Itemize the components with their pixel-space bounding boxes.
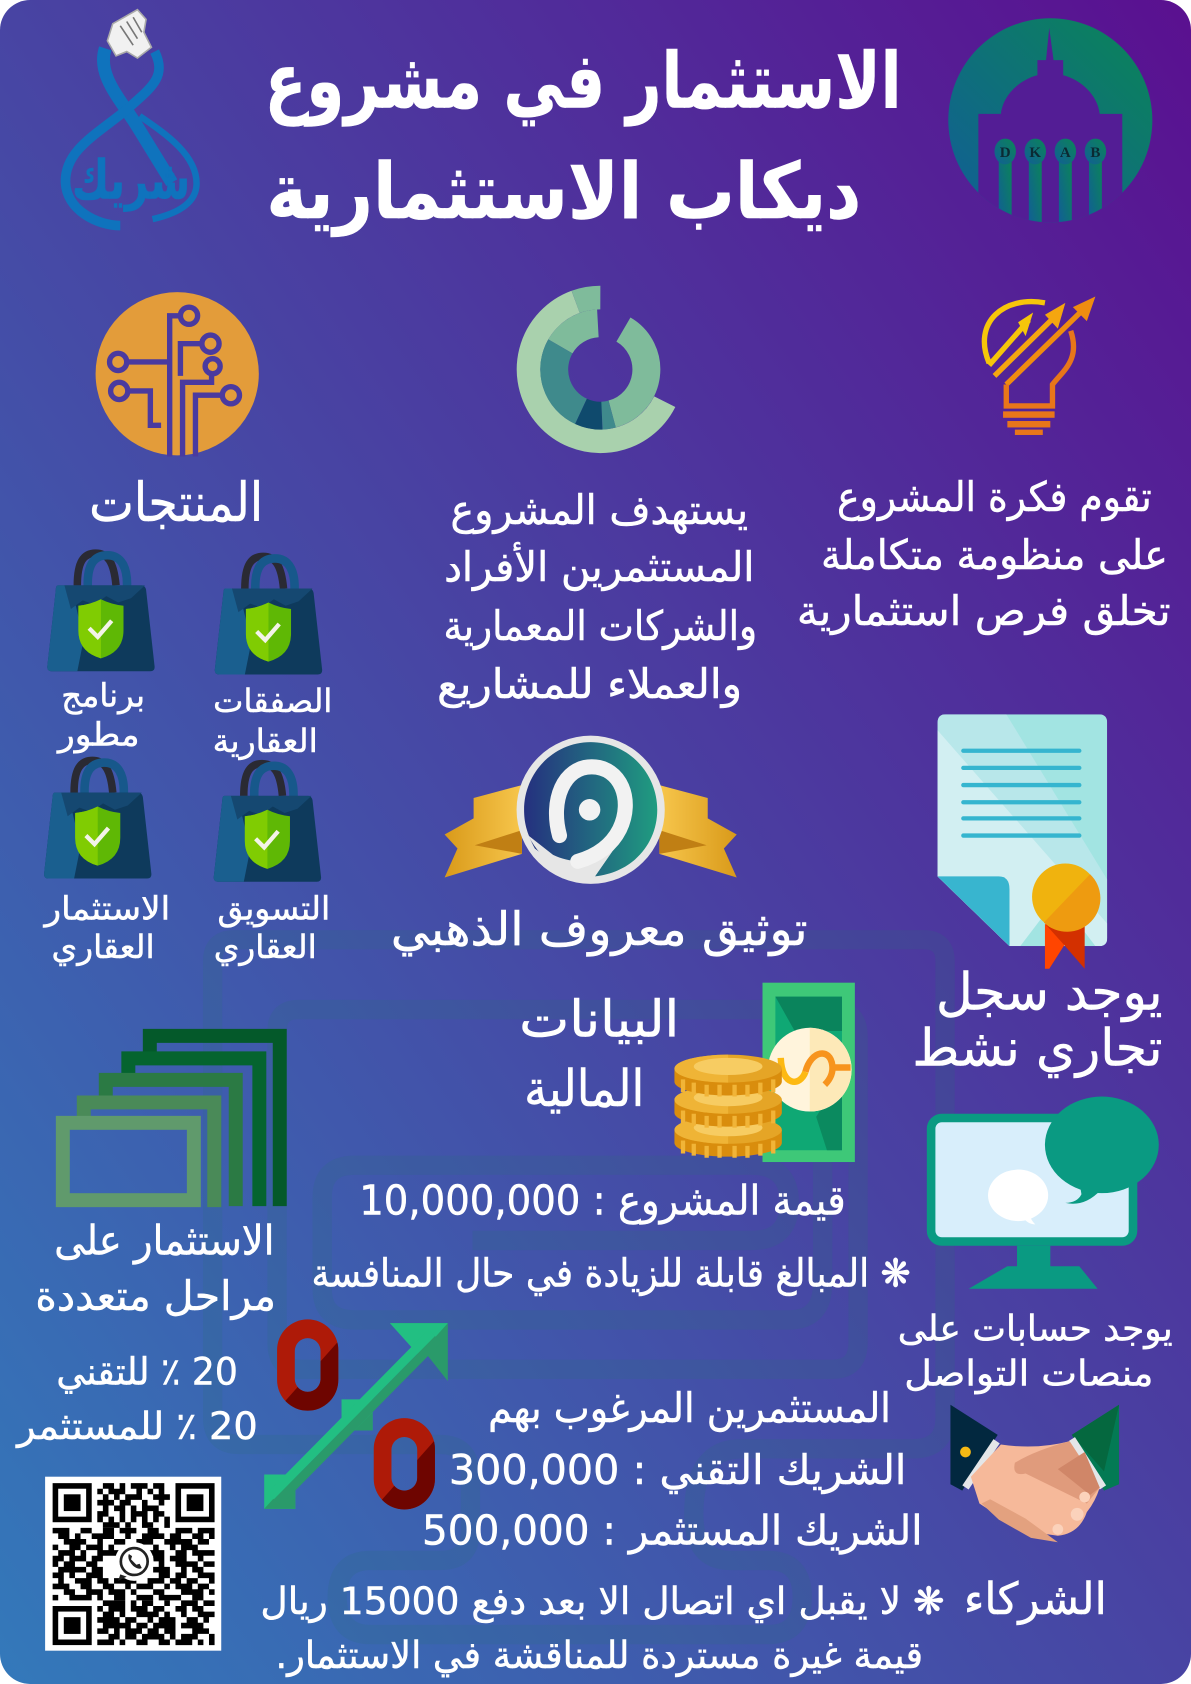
icon: certificate — [938, 714, 1107, 969]
text: target audience: والعملاء للمشاريع — [437, 660, 742, 708]
heading: products: المنتجات — [89, 471, 263, 534]
text: amounts note: ❋ المبالغ قابلة للزيادة في حال المنافسة — [311, 1252, 911, 1297]
QR code — [45, 1477, 221, 1651]
text: multi-stage investing: مراحل متعددة — [35, 1272, 276, 1320]
logo: partner calligraphy with handshake: شريك — [72, 149, 190, 212]
logo: DKAB dome: K — [1029, 145, 1041, 161]
text: commercial register: تجاري نشط — [912, 1018, 1163, 1078]
logo: DKAB dome: D — [1000, 145, 1011, 161]
heading: financial data: البيانات — [519, 989, 679, 1048]
product labels: برنامج — [61, 677, 145, 715]
icon: bag developed software — [47, 553, 155, 671]
text: project idea: على منظومة متكاملة — [821, 531, 1168, 579]
text: target audience: والشركات المعمارية — [444, 602, 757, 650]
text: wanted investors — [422, 1384, 923, 1554]
logo: DKAB dome: B — [1090, 145, 1100, 161]
text: social accounts: يوجد حسابات على — [898, 1308, 1173, 1349]
text: commercial register: يوجد سجل — [936, 963, 1163, 1023]
text: project idea — [797, 473, 1171, 635]
text: wanted investors: الشريك التقني : 300,000 — [449, 1446, 906, 1494]
text: multi-stage investing: الاستثمار على — [54, 1216, 274, 1264]
text: shares — [15, 1349, 258, 1448]
icon: handshake — [950, 1405, 1119, 1542]
icon: Maroof gold badge — [445, 736, 737, 884]
text: Maroof gold verification: توثيق معروف الذهبي — [391, 902, 808, 957]
icon: monitor with chat bubbles — [931, 1097, 1159, 1289]
chart: donut — [529, 298, 665, 441]
icon: money and coins — [674, 983, 855, 1162]
product labels: الاستثمار — [42, 889, 170, 927]
text: commercial register — [912, 963, 1163, 1078]
text: target audience: المستثمرين الأفراد — [444, 542, 754, 591]
title: الاستثمار في مشروع — [265, 36, 902, 126]
text: multi-stage investing — [35, 1216, 276, 1320]
logo: DKAB dome: A — [1060, 145, 1071, 161]
icon: bag real estate deals — [215, 556, 322, 674]
text: social accounts — [898, 1308, 1173, 1394]
text: target audience: يستهدف المشروع — [451, 486, 748, 534]
product labels: العقارية — [213, 722, 318, 760]
product labels — [42, 677, 332, 966]
title: ديكاب الاستثمارية — [266, 147, 861, 237]
heading: financial data: المالية — [524, 1059, 644, 1118]
product labels: مطور — [56, 715, 140, 753]
text: contact note: ❋ لا يقبل اي اتصال الا بعد دفع 15000 ريال — [260, 1579, 945, 1624]
text: project idea: تخلق فرص استثمارية — [797, 587, 1171, 635]
text: shares: 20 ٪ للتقني — [56, 1349, 238, 1393]
product labels: العقاري — [52, 928, 155, 966]
text: wanted investors: الشريك المستثمر : 500,000 — [422, 1506, 923, 1554]
logo: DKAB dome — [948, 18, 1152, 231]
text: project value: قيمة المشروع : 10,000,000 — [359, 1177, 846, 1225]
icon: light bulb with arrows — [984, 296, 1095, 435]
text: social accounts: منصات التواصل — [904, 1353, 1153, 1394]
text: project idea: تقوم فكرة المشروع — [837, 473, 1152, 521]
text: target audience — [437, 486, 757, 708]
text: contact note: قيمة غيرة مستردة للمناقشة في الاستثمار. — [275, 1633, 923, 1677]
icon: bag real estate marketing — [214, 764, 321, 882]
heading: partners: الشركاء — [964, 1574, 1107, 1625]
icon: WhatsApp — [115, 1542, 154, 1581]
heading: financial data — [519, 989, 679, 1118]
icon: stacked frames — [63, 1036, 280, 1207]
icon: circuit circle — [96, 292, 259, 456]
logo: partner calligraphy with handshake — [65, 10, 197, 226]
product labels: العقاري — [214, 928, 317, 966]
product labels: التسويق — [217, 889, 330, 927]
text: contact note — [260, 1579, 945, 1677]
title — [265, 36, 902, 237]
icon: percent arrow — [264, 1318, 448, 1513]
background serpentine path — [213, 940, 945, 1635]
text: shares: 20 ٪ للمستثمر — [15, 1404, 258, 1448]
icon: bag real estate investment — [44, 760, 151, 879]
text: wanted investors: المستثمرين المرغوب بهم — [488, 1384, 891, 1432]
product labels: الصفقات — [213, 682, 332, 720]
